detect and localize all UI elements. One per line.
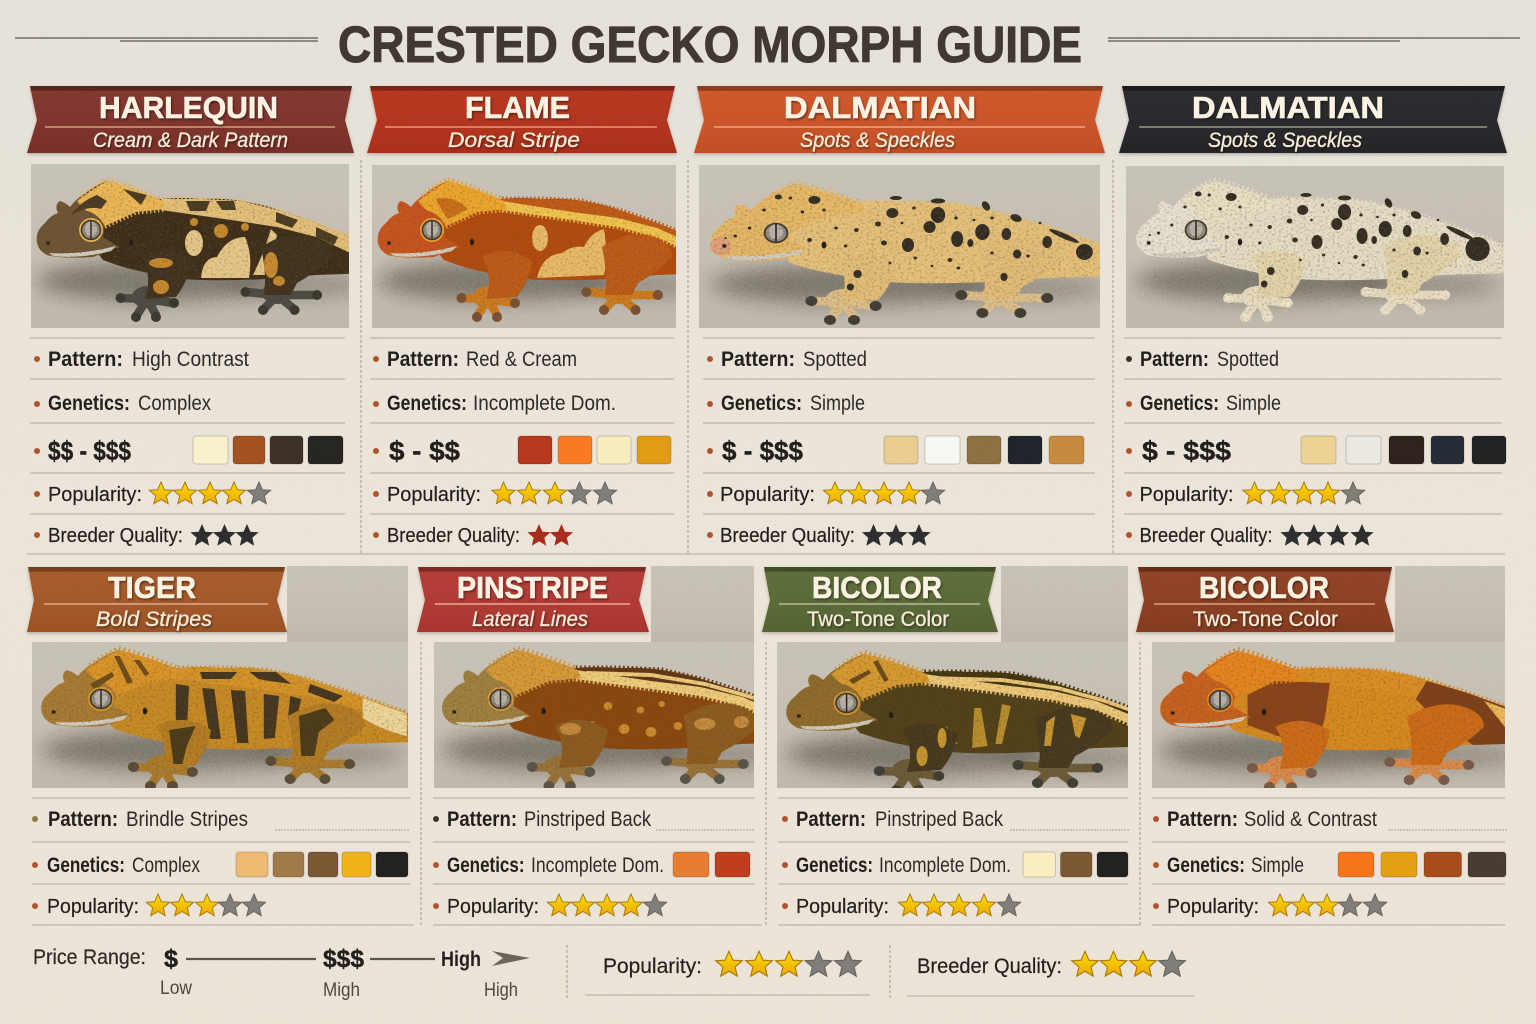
banner: Tiger: Bold Stripes <box>96 608 213 631</box>
row: pattern <box>32 808 248 831</box>
banner: Bicolor rust: BICOLOR <box>1199 570 1329 605</box>
banner: Bicolor rust <box>1136 567 1394 632</box>
rating: breeder quality: Breeder Quality: <box>1140 525 1272 547</box>
banner: Dalmatian dark: Spots & Speckles <box>1208 129 1362 152</box>
row: genetics: Genetics: <box>1167 854 1245 877</box>
row: genetics: Genetics: <box>47 854 125 877</box>
row: pattern <box>1153 808 1377 831</box>
colour swatches <box>1023 852 1128 877</box>
photo: pale Dalmatian gecko <box>1126 166 1510 328</box>
legend: price range: Low <box>160 978 192 999</box>
rating: popularity <box>34 482 271 506</box>
row: genetics: Incomplete Dom. <box>473 392 616 415</box>
rating: popularity: Popularity: <box>447 896 539 918</box>
banner: Dalmatian orange: Spots & Speckles <box>800 129 955 152</box>
banner: Dalmatian dark <box>1119 86 1507 153</box>
row: genetics: Genetics: <box>387 392 467 415</box>
legend: price range <box>33 945 530 1001</box>
row: price: $$ - $$$ <box>48 436 131 466</box>
row: pattern <box>782 808 1003 831</box>
rating: breeder quality <box>707 524 931 547</box>
rating: popularity: Popularity: <box>1140 484 1234 506</box>
row: genetics: Simple <box>1251 854 1304 877</box>
row: genetics: Simple <box>810 392 865 415</box>
rating: breeder quality: Breeder Quality: <box>720 525 855 547</box>
panel: Pinstripe <box>416 566 762 926</box>
rating: popularity <box>32 894 266 918</box>
row: genetics <box>373 392 616 415</box>
rating: breeder quality: Breeder Quality: <box>48 525 183 547</box>
rating: popularity <box>707 482 945 506</box>
banner: Tiger <box>27 567 287 632</box>
legend: price range: $ <box>164 945 178 973</box>
banner: Pinstripe: Lateral Lines <box>472 608 588 631</box>
row: genetics: Complex <box>138 392 211 415</box>
photo: Pinstripe gecko <box>434 566 754 788</box>
row: genetics <box>32 854 200 877</box>
colour swatches <box>236 852 408 877</box>
legend: breeder quality <box>907 951 1194 996</box>
panel: Dalmatian dark <box>1119 86 1510 547</box>
legend: breeder quality: Breeder Quality: <box>917 955 1062 978</box>
banner: Harlequin: Cream & Dark Pattern <box>93 129 288 152</box>
banner: Flame <box>367 86 677 153</box>
row: pattern: Pattern: <box>721 348 795 371</box>
row: pattern <box>433 808 651 831</box>
banner: Dalmatian orange <box>694 86 1105 153</box>
rating: popularity <box>782 894 1021 918</box>
row: pattern <box>1126 348 1279 371</box>
rating: popularity: Popularity: <box>720 484 815 506</box>
banner: Pinstripe: PINSTRIPE <box>457 570 608 605</box>
row: pattern <box>34 348 249 371</box>
row: genetics: Genetics: <box>721 392 802 415</box>
panel: Harlequin <box>27 86 376 547</box>
rating: breeder quality <box>1126 524 1374 547</box>
rating: popularity: Popularity: <box>387 484 481 506</box>
banner: Bicolor green: BICOLOR <box>812 570 942 605</box>
row: pattern: Pinstriped Back <box>875 808 1003 831</box>
rating: popularity <box>373 482 617 506</box>
photo: Flame gecko <box>372 165 676 328</box>
panel: Bicolor green <box>762 566 1163 925</box>
row: pattern <box>373 348 577 371</box>
row: genetics: Incomplete Dom. <box>879 854 1011 877</box>
row: pattern: Pattern: <box>48 348 123 371</box>
banner: Dalmatian orange: DALMATIAN <box>784 90 976 125</box>
row: genetics: Incomplete Dom. <box>531 854 664 877</box>
row: genetics: Genetics: <box>1140 392 1219 415</box>
colour swatches <box>1338 852 1506 877</box>
banner: Pinstripe <box>417 567 649 632</box>
rating: popularity: Popularity: <box>48 484 142 506</box>
colour swatches <box>673 852 750 877</box>
banner: Bicolor green: Two-Tone Color <box>807 608 949 631</box>
row: pattern: Spotted <box>1217 348 1279 371</box>
legend: price range: High <box>484 980 518 1001</box>
banner: Dalmatian dark: DALMATIAN <box>1192 90 1384 125</box>
row: pattern: Pattern: <box>447 808 517 831</box>
panel: Flame <box>366 86 678 546</box>
row: pattern: Brindle Stripes <box>126 808 248 831</box>
row: pattern: Pattern: <box>796 808 866 831</box>
row: genetics <box>707 392 865 415</box>
row: genetics: Simple <box>1226 392 1281 415</box>
panel: Tiger <box>27 566 414 925</box>
rating: popularity <box>1153 894 1387 918</box>
legend: price range: $$$ <box>323 945 364 973</box>
rating: breeder quality <box>373 524 573 547</box>
photo: Harlequin gecko <box>31 164 376 328</box>
photo: Tiger gecko <box>32 566 414 791</box>
row: price: $ - $$ <box>389 436 460 466</box>
title: CRESTED GECKO MORPH GUIDE <box>338 16 1082 73</box>
row: genetics: Complex <box>132 854 200 877</box>
banner: Harlequin: HARLEQUIN <box>99 90 278 125</box>
rating: popularity <box>433 894 667 918</box>
row: pattern: Solid & Contrast <box>1244 808 1377 831</box>
photo: Bicolor dark gecko <box>777 566 1128 788</box>
banner: Harlequin <box>27 86 354 153</box>
photo: Dalmatian gecko <box>699 165 1118 328</box>
legend <box>33 945 1194 1001</box>
row: pattern: Pattern: <box>1167 808 1238 831</box>
row: genetics: Genetics: <box>796 854 873 877</box>
row: genetics <box>1153 854 1304 877</box>
banner: Bicolor rust: Two-Tone Color <box>1193 608 1338 631</box>
rating: popularity: Popularity: <box>796 896 889 918</box>
row: pattern <box>707 348 867 371</box>
banner: Flame: Dorsal Stripe <box>448 129 580 152</box>
row: pattern: Pattern: <box>1140 348 1209 371</box>
rating: breeder quality: Breeder Quality: <box>387 525 520 547</box>
row: pattern: Pattern: <box>48 808 118 831</box>
legend: price range: High <box>441 948 481 971</box>
panel: Bicolor rust <box>1136 566 1534 925</box>
legend: popularity <box>585 951 870 995</box>
colour swatches <box>193 436 343 464</box>
rating: popularity <box>1126 482 1365 506</box>
row: pattern: Red & Cream <box>466 348 577 371</box>
row: price: $ - $$$ <box>1142 436 1231 466</box>
row: genetics: Genetics: <box>48 392 130 415</box>
row: pattern: Spotted <box>803 348 867 371</box>
rating: breeder quality <box>34 524 259 547</box>
legend: price range: Migh <box>323 980 360 1001</box>
colour swatches <box>518 436 671 464</box>
row: pattern: High Contrast <box>132 348 249 371</box>
row: genetics <box>782 854 1011 877</box>
banner: Tiger: TIGER <box>108 570 196 605</box>
panel: Dalmatian orange <box>694 86 1118 547</box>
row: pattern: Pinstriped Back <box>524 808 651 831</box>
colour swatches <box>884 436 1084 464</box>
rating: popularity: Popularity: <box>1167 896 1259 918</box>
colour swatches <box>1301 436 1506 464</box>
photo: Bicolor orange gecko <box>1152 566 1534 792</box>
banner: Bicolor green <box>762 567 998 632</box>
row: genetics <box>433 854 664 877</box>
legend: price range: Price Range: <box>33 946 146 969</box>
rating: popularity: Popularity: <box>47 896 139 918</box>
banner: Flame: FLAME <box>465 90 570 125</box>
row: genetics: Genetics: <box>447 854 524 877</box>
row: genetics <box>34 392 211 415</box>
row: pattern: Pattern: <box>387 348 459 371</box>
row: genetics <box>1126 392 1281 415</box>
legend: popularity: Popularity: <box>603 955 702 978</box>
row: price: $ - $$$ <box>722 436 803 466</box>
